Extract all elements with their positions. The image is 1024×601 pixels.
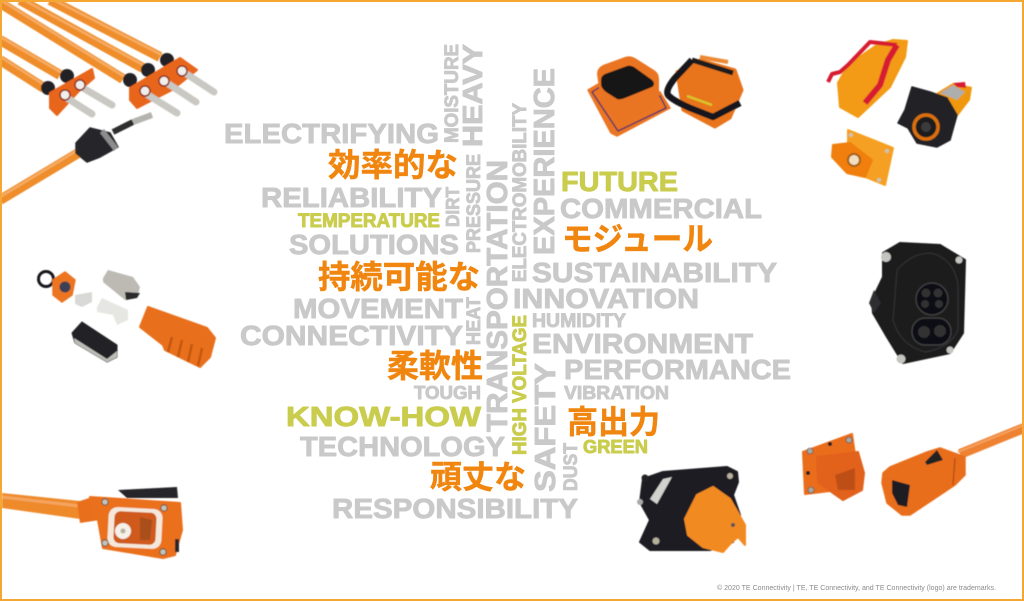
word: DUST: DUST bbox=[561, 443, 582, 491]
product: red and orange connectors top right bbox=[828, 40, 972, 185]
word: SAFETY: SAFETY bbox=[530, 363, 562, 492]
product: orange header and cable plug bottom right bbox=[803, 425, 1024, 515]
word: HUMIDITY: HUMIDITY bbox=[532, 311, 626, 332]
product: square header and plug top centre bbox=[588, 56, 742, 136]
word: HEAVY: HEAVY bbox=[457, 44, 488, 147]
word: GREEN: GREEN bbox=[583, 437, 648, 457]
word: sustainable (JP): 持続可能な bbox=[318, 259, 480, 295]
word: TECHNOLOGY: TECHNOLOGY bbox=[300, 431, 505, 462]
product: black and orange switch bottom centre bbox=[637, 467, 745, 552]
word: EXPERIENCE: EXPERIENCE bbox=[529, 68, 561, 255]
copyright notice: © 2020 TE Connectivity | TE, TE Connectivity, and TE Connectivity (logo) are trademarks. bbox=[717, 584, 996, 592]
word: HEAT: HEAT bbox=[464, 297, 485, 345]
product: HV cable connectors top left bbox=[0, 0, 214, 200]
word: PERFORMANCE: PERFORMANCE bbox=[564, 354, 791, 385]
word: SOLUTIONS: SOLUTIONS bbox=[289, 229, 459, 260]
word: MOVEMENT: MOVEMENT bbox=[293, 293, 463, 324]
word: ENVIRONMENT: ENVIRONMENT bbox=[532, 328, 753, 359]
word: KNOW-HOW: KNOW-HOW bbox=[286, 401, 482, 432]
word: module (JP): モジュール bbox=[562, 221, 713, 257]
word: RESPONSIBILITY: RESPONSIBILITY bbox=[332, 493, 578, 524]
word: ELECTRIFYING: ELECTRIFYING bbox=[224, 118, 439, 149]
word: PRESSURE: PRESSURE bbox=[464, 154, 485, 253]
word: COMMERCIAL: COMMERCIAL bbox=[560, 193, 762, 224]
word: VIBRATION: VIBRATION bbox=[564, 383, 669, 403]
word: DIRT: DIRT bbox=[443, 187, 463, 227]
word cloud bbox=[224, 44, 791, 524]
word: TEMPERATURE: TEMPERATURE bbox=[298, 211, 440, 232]
word: ELECTROMOBILITY: ELECTROMOBILITY bbox=[510, 103, 531, 282]
word: RELIABILITY: RELIABILITY bbox=[261, 182, 442, 213]
word: robust (JP): 頑丈な bbox=[430, 459, 526, 495]
word: high power (JP): 高出力 bbox=[567, 404, 660, 440]
word: TOUGH: TOUGH bbox=[414, 383, 481, 403]
word: FUTURE: FUTURE bbox=[561, 166, 678, 197]
word: TRANSPORTATION: TRANSPORTATION bbox=[482, 160, 514, 432]
word: SUSTAINABILITY: SUSTAINABILITY bbox=[532, 257, 777, 288]
word: HIGH VOLTAGE: HIGH VOLTAGE bbox=[510, 315, 531, 455]
word: CONNECTIVITY: CONNECTIVITY bbox=[240, 320, 463, 351]
word: MOISTURE: MOISTURE bbox=[442, 44, 463, 143]
product: exploded connector kit left bbox=[38, 270, 215, 367]
word: flexibility (JP): 柔軟性 bbox=[387, 348, 483, 384]
product: black charging inlet right bbox=[869, 243, 965, 364]
product: orange inverter connector bottom left bbox=[2, 487, 182, 558]
word: INNOVATION: INNOVATION bbox=[513, 283, 699, 314]
word: efficient (JP): 効率的な bbox=[328, 147, 458, 183]
